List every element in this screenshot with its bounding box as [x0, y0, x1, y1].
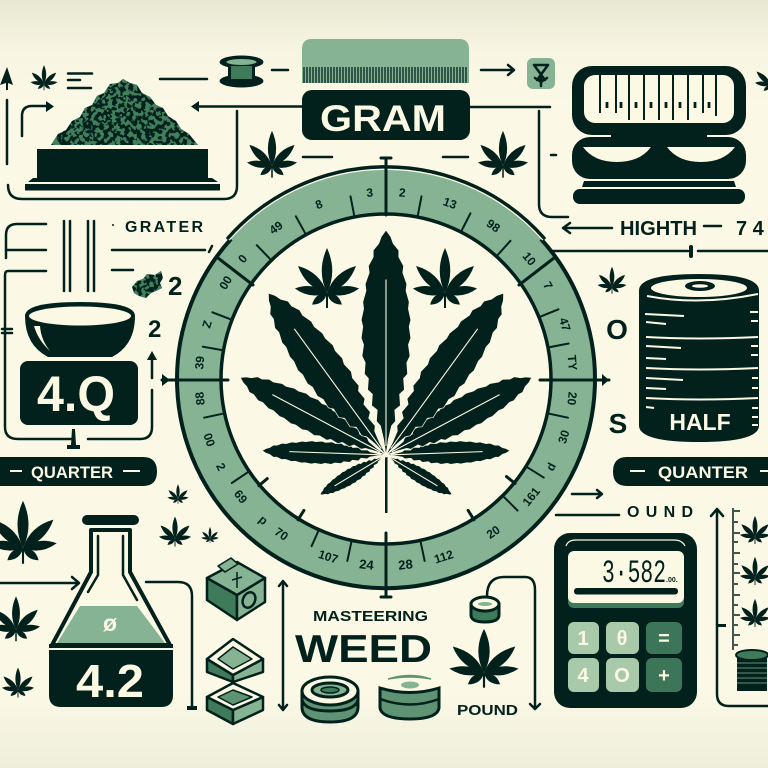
panel: measuring ring — [162, 158, 609, 597]
text: O: O — [606, 314, 628, 345]
text: HIGHTH: 7 4 — [736, 218, 765, 240]
text: HIGHTH: HIGHTH — [620, 218, 697, 240]
icon: small spool — [220, 56, 264, 88]
icon: middle cube — [207, 639, 263, 682]
ring labels: 3 — [366, 185, 374, 200]
icon: Pound leaf — [449, 629, 519, 688]
calculator buttons: θ — [617, 628, 627, 650]
ring labels: 2 — [213, 461, 229, 473]
calculator buttons — [568, 622, 682, 692]
ring labels: 107 — [317, 547, 340, 567]
title: WEED: WEED — [295, 628, 432, 671]
icon: leaf left of ring top — [246, 131, 298, 178]
calculator buttons: O — [614, 665, 630, 687]
right ruler with arrow — [711, 508, 768, 706]
icon: stacked disc right — [380, 676, 439, 719]
panel: GRAM ruler heading: GRAM — [320, 98, 446, 139]
ring labels: 88 — [192, 391, 208, 406]
icon: ruler leaf 1 — [740, 516, 768, 544]
icon: leaf right of ring top — [477, 131, 529, 178]
top-left dashes — [68, 70, 288, 88]
ring labels: 10 — [520, 249, 539, 269]
ring labels: d — [543, 460, 559, 473]
arrow: above calculator — [572, 490, 602, 498]
icon: leaf above barrel — [597, 267, 627, 294]
ring side arrowheads — [162, 374, 609, 386]
panel: 4.Q display: 4.Q — [37, 366, 115, 422]
ring cross lines — [162, 158, 609, 597]
icon: green square glyph — [527, 58, 555, 89]
ring labels: 49 — [267, 218, 286, 237]
ring labels: 28 — [398, 556, 413, 573]
ring labels: 00 — [216, 273, 235, 292]
panel: flask 4.2 — [49, 515, 173, 707]
title: MASTEERING: MASTEERING — [313, 608, 428, 625]
pill: QUARTER: QUARTER — [31, 463, 113, 482]
panel: calculator: .00. — [666, 577, 678, 584]
ring labels: 13 — [441, 194, 459, 212]
bracket around weed pile — [7, 100, 237, 199]
icon: leaf under QUARTER pill — [167, 484, 189, 504]
icon: small leaf bottom-left — [2, 668, 34, 698]
icon: bottom cube — [207, 683, 263, 724]
ring labels: 8 — [313, 197, 325, 212]
ring labels: 2 — [398, 185, 407, 200]
connector: GRAM to scale — [470, 107, 568, 217]
icon: medium leaf bottom-left — [0, 596, 41, 641]
panel: HALF barrel — [639, 274, 759, 442]
pill: QUANTER: QUANTER — [658, 463, 748, 482]
arrow: GRAM to pile — [191, 101, 303, 112]
icon: inner right leaf — [412, 248, 478, 308]
main cannabis leaf — [232, 230, 540, 513]
icon: ruler leaf 2 — [740, 557, 768, 585]
marker under display — [67, 429, 80, 449]
ring ticks — [203, 196, 569, 561]
icon: small pot — [471, 597, 499, 622]
icon: leaf at right edge — [755, 62, 768, 92]
ring labels: 30 — [555, 428, 573, 445]
ring labels: 24 — [359, 556, 375, 573]
ring labels: TY — [565, 354, 580, 371]
text: GRATER: GRATER — [125, 219, 203, 236]
calculator buttons: 4 — [577, 665, 589, 687]
panel: flask 4.2: 4.2 — [76, 655, 144, 707]
icon: ruler spool — [736, 650, 768, 691]
pill: QUANTER — [613, 457, 768, 486]
arrow: double vertical — [279, 581, 287, 710]
ring labels: 20 — [564, 391, 580, 406]
calculator buttons: = — [658, 628, 670, 650]
text: number 2 upper: 2 — [168, 271, 182, 301]
panel: HALF barrel: HALF — [669, 409, 731, 435]
dashes beside leaves — [303, 156, 468, 158]
text: number 2 lower: 2 — [148, 316, 161, 343]
icon: large leaf bottom-left — [0, 501, 57, 564]
ring labels: 0 — [235, 251, 250, 266]
left connector lines — [2, 221, 212, 439]
panel: calculator: 3·582 — [602, 555, 666, 592]
ring labels: 112 — [432, 547, 455, 566]
arrow: bent arrow to pile — [22, 101, 54, 136]
ring labels: 7 — [540, 279, 556, 292]
text: S: S — [609, 408, 627, 439]
text: HIGHTH — [563, 218, 765, 240]
connector with tick — [552, 245, 768, 258]
icon: small leaf top left — [30, 65, 58, 90]
ring labels: 47 — [556, 316, 574, 333]
arrow: up to 2 — [147, 351, 157, 378]
calculator buttons: + — [658, 665, 670, 687]
ring labels: Z — [199, 319, 215, 330]
icon: tiny leaf — [201, 527, 219, 543]
icon: bud — [132, 271, 163, 298]
arrow: to small icon — [481, 65, 514, 75]
ring labels: 20 — [484, 522, 503, 542]
ring labels: 70 — [272, 524, 291, 544]
icon: ruler leaf 3 — [740, 599, 768, 627]
text: OUND: OUND — [627, 504, 693, 521]
ring labels — [192, 185, 580, 573]
ring labels: 161 — [520, 484, 543, 509]
ring labels: 69 — [231, 487, 251, 507]
calculator buttons: 1 — [577, 628, 589, 650]
ring labels: 00 — [200, 431, 218, 449]
ring labels: p — [256, 512, 271, 528]
panel: calculator — [554, 533, 697, 708]
connector line — [556, 514, 619, 516]
icon: stacked disc left — [302, 677, 358, 722]
icon: top-left spade — [0, 67, 13, 90]
ring labels: 39 — [192, 355, 207, 370]
panel: flask 4.2: ø — [103, 610, 117, 636]
panel: 4.Q display — [20, 361, 138, 425]
text: POUND: POUND — [457, 702, 518, 719]
connector: pot to pound — [487, 577, 540, 709]
icon: inner left leaf — [294, 248, 360, 308]
pill: QUARTER — [0, 457, 157, 486]
panel: balance scale — [572, 66, 746, 204]
icon: top cube — [207, 558, 265, 620]
panel: weed pile on tray — [25, 79, 220, 190]
ring labels: 98 — [484, 216, 503, 236]
icon: leaf above flask right — [159, 516, 191, 546]
panel: bowl — [25, 302, 135, 357]
arrow: into flask — [0, 577, 79, 589]
connector: flask to bottom — [146, 582, 197, 710]
panel: GRAM ruler heading — [302, 39, 470, 140]
